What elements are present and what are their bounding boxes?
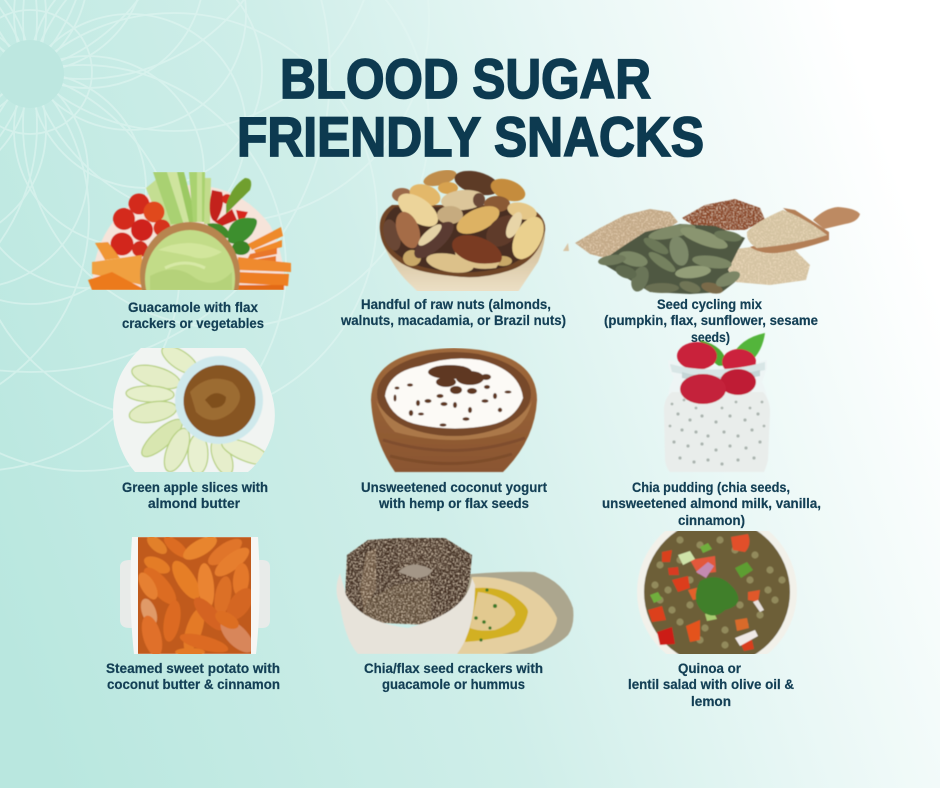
caption: coconut butter & cinnamon — [107, 677, 280, 692]
panel: lentil salad — [628, 531, 796, 706]
caption: lemon — [691, 694, 731, 709]
caption: lentil salad with olive oil & — [628, 677, 794, 692]
panel: seed crackers — [336, 538, 573, 692]
caption: Handful of raw nuts (almonds, — [361, 297, 551, 312]
panel: seed cycling mix — [563, 199, 860, 345]
icon: wooden bowl of yogurt — [371, 348, 537, 472]
title — [237, 47, 704, 168]
icon: chia pudding jar with raspberries — [664, 333, 770, 472]
title: FRIENDLY SNACKS — [237, 105, 704, 168]
caption — [604, 297, 818, 345]
caption — [122, 480, 268, 511]
icon: sweet potato wedges — [138, 537, 251, 654]
caption: crackers or vegetables — [122, 316, 264, 331]
panel: chia pudding — [602, 333, 821, 528]
caption: Guacamole with flax — [128, 300, 258, 315]
caption: Steamed sweet potato with — [106, 661, 280, 676]
caption — [602, 480, 821, 528]
caption: walnuts, macadamia, or Brazil nuts) — [340, 313, 566, 328]
panel: sweet potato — [106, 532, 280, 692]
caption: Chia/flax seed crackers with — [364, 661, 543, 676]
caption — [361, 480, 547, 511]
caption: Green apple slices with — [122, 480, 268, 495]
caption: Seed cycling mix — [657, 297, 762, 312]
panel: green apple with almond butter — [113, 348, 275, 508]
title: BLOOD SUGAR — [280, 47, 651, 110]
panel: raw nuts — [340, 166, 566, 328]
caption — [106, 661, 280, 692]
caption — [364, 661, 543, 692]
icon: guacamole with vegetables — [88, 172, 292, 290]
icon: baking dish of sweet potato — [120, 537, 270, 654]
caption — [122, 300, 264, 331]
icon: bowl of Brazil nuts — [380, 166, 550, 292]
icon: apple slices and almond butter — [113, 348, 275, 472]
panel: coconut yogurt — [361, 348, 547, 511]
caption — [340, 297, 566, 328]
caption: cinnamon) — [678, 513, 745, 528]
icon: crackers and hummus — [336, 538, 573, 654]
caption — [628, 661, 794, 709]
caption: almond butter — [148, 496, 241, 511]
caption: (pumpkin, flax, sunflower, sesame — [604, 313, 818, 328]
caption: Chia pudding (chia seeds, — [632, 480, 790, 495]
caption: with hemp or flax seeds — [378, 496, 529, 511]
caption: Unsweetened coconut yogurt — [361, 480, 547, 495]
caption: guacamole or hummus — [382, 677, 525, 692]
icon: seed piles with scoop — [563, 199, 860, 296]
icon: lentil salad bowl — [637, 531, 796, 654]
caption: seeds) — [691, 330, 730, 345]
panel: guacamole — [88, 172, 291, 331]
caption: Quinoa or — [678, 661, 742, 676]
caption: unsweetened almond milk, vanilla, — [602, 496, 821, 511]
